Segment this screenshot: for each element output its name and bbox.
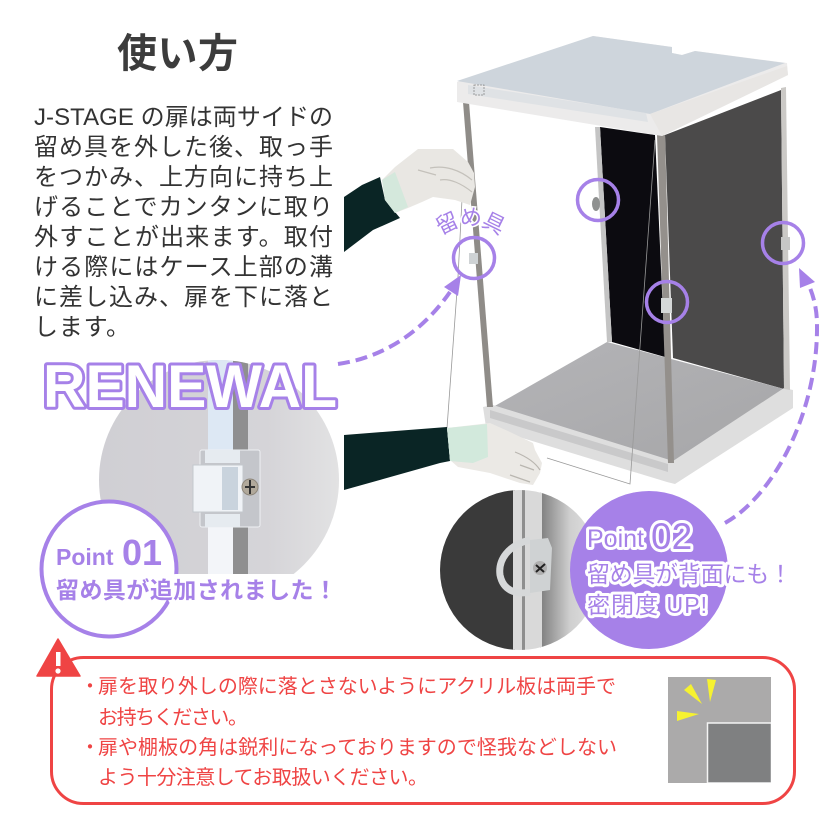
top panel bbox=[457, 36, 788, 136]
text block: instructions: をつかみ、上方向に持ち上 bbox=[34, 164, 333, 191]
clip on right pillar bbox=[781, 237, 790, 250]
spark 1 bbox=[684, 684, 702, 704]
highlight circles bbox=[454, 180, 804, 322]
exclamation bar bbox=[56, 652, 60, 666]
clip on door bbox=[469, 253, 478, 264]
back pillar bbox=[595, 127, 612, 342]
exclamation dot bbox=[55, 668, 61, 674]
top surface bbox=[457, 36, 785, 114]
rail upper bbox=[208, 360, 233, 455]
floor bbox=[493, 342, 784, 463]
warning text: 扉を取り外しの際に落とさないようにアクリル板は両手で bbox=[98, 675, 616, 698]
label: fastener bbox=[432, 205, 509, 240]
text block: instructions bbox=[34, 104, 333, 341]
label: fastener: め bbox=[460, 205, 482, 230]
upper cuff bbox=[382, 172, 408, 213]
photo circle: point 01 closeup bbox=[99, 360, 339, 574]
top side bbox=[650, 66, 788, 136]
wall light bbox=[540, 492, 585, 648]
front left pillar bbox=[463, 102, 493, 407]
acrylic door edge right bbox=[547, 140, 655, 484]
label: fastener: 具 bbox=[478, 207, 509, 240]
warning text bbox=[80, 675, 617, 789]
clip bottom ridge bbox=[205, 514, 240, 527]
lower cuff bbox=[447, 424, 488, 463]
point number: 02 bbox=[651, 516, 692, 557]
base bbox=[483, 388, 793, 484]
arrow: to front fastener bbox=[338, 275, 461, 364]
photo circle: point 02 closeup bbox=[440, 490, 585, 650]
warning text: お持ちください。 bbox=[98, 706, 248, 729]
lower glove bbox=[447, 423, 542, 485]
clip on back pillar bbox=[592, 197, 600, 211]
upper arm bbox=[344, 177, 400, 252]
badge: point 02 bbox=[570, 491, 792, 649]
description line 1: 留め具が背面にも！ bbox=[587, 561, 792, 587]
clip top ridge bbox=[205, 450, 240, 463]
D ring bbox=[500, 540, 530, 593]
screw bbox=[242, 479, 258, 495]
photo: sharp corner bbox=[668, 677, 774, 785]
label: fastener: 留 bbox=[432, 207, 463, 240]
title: 使い方 bbox=[117, 32, 238, 76]
screw slot bbox=[536, 564, 545, 572]
clip center bbox=[193, 465, 243, 512]
lower arm bbox=[344, 427, 450, 490]
point description: 留め具が追加されました！ bbox=[56, 577, 337, 603]
text block: instructions: J-STAGE の扉は両サイドの bbox=[34, 104, 333, 131]
warning text: ・ bbox=[80, 737, 100, 759]
right wall bbox=[665, 90, 784, 389]
screw slot bbox=[245, 480, 255, 494]
upper fingers bbox=[418, 167, 472, 192]
text block: instructions: ける際にはケース上部の溝 bbox=[34, 254, 333, 281]
door corner bbox=[708, 723, 772, 783]
description line 2: 密閉度 UP! bbox=[587, 592, 707, 618]
acrylic door edge left bbox=[447, 180, 463, 428]
rail bbox=[513, 490, 542, 650]
photo: display case with hands bbox=[344, 36, 793, 490]
rail shadow bbox=[233, 360, 248, 574]
text block: instructions: 外すことが出来ます。取付 bbox=[34, 224, 333, 251]
text block: instructions: に差し込み、扉を下に落と bbox=[34, 284, 333, 311]
warning panel bbox=[37, 639, 794, 804]
spark 3 bbox=[677, 711, 699, 721]
clip on front pillar bbox=[661, 298, 672, 313]
spark 2 bbox=[707, 679, 716, 702]
warning text: よう十分注意してお取扱いください。 bbox=[98, 766, 428, 789]
point number: 01 bbox=[122, 532, 162, 573]
top latch bbox=[474, 85, 484, 95]
badge: point 01 bbox=[42, 502, 343, 636]
warning text: ・ bbox=[80, 676, 100, 698]
warning icon bbox=[37, 639, 80, 676]
right pillar bbox=[781, 87, 790, 390]
arrow: to rear fastener bbox=[725, 268, 817, 523]
text block: instructions: します。 bbox=[34, 314, 130, 341]
text block: instructions: 留め具を外した後、取っ手 bbox=[34, 134, 333, 161]
white band bbox=[168, 574, 343, 606]
base inner shade bbox=[490, 410, 668, 472]
cover overflow bottom bbox=[705, 783, 773, 785]
RENEWAL heading: RENEWAL bbox=[43, 353, 337, 420]
back wall bbox=[600, 127, 665, 357]
lower fingers bbox=[510, 452, 540, 482]
clip back plate bbox=[200, 450, 260, 527]
rail lower bbox=[208, 528, 233, 574]
top front slot bbox=[468, 85, 648, 122]
clip center stripe bbox=[222, 467, 238, 510]
upper glove bbox=[382, 149, 475, 213]
cover overflow bbox=[771, 720, 774, 785]
point label: Point bbox=[587, 525, 644, 553]
front right pillar bbox=[657, 135, 674, 463]
clip plate bbox=[530, 538, 552, 593]
text block: instructions: げることでカンタンに取り bbox=[34, 194, 333, 221]
warning text: 扉や棚板の角は鋭利になっておりますので怪我などしない bbox=[98, 736, 617, 759]
rail line bbox=[522, 490, 525, 650]
point label: Point bbox=[56, 544, 114, 570]
screw bbox=[533, 561, 547, 575]
